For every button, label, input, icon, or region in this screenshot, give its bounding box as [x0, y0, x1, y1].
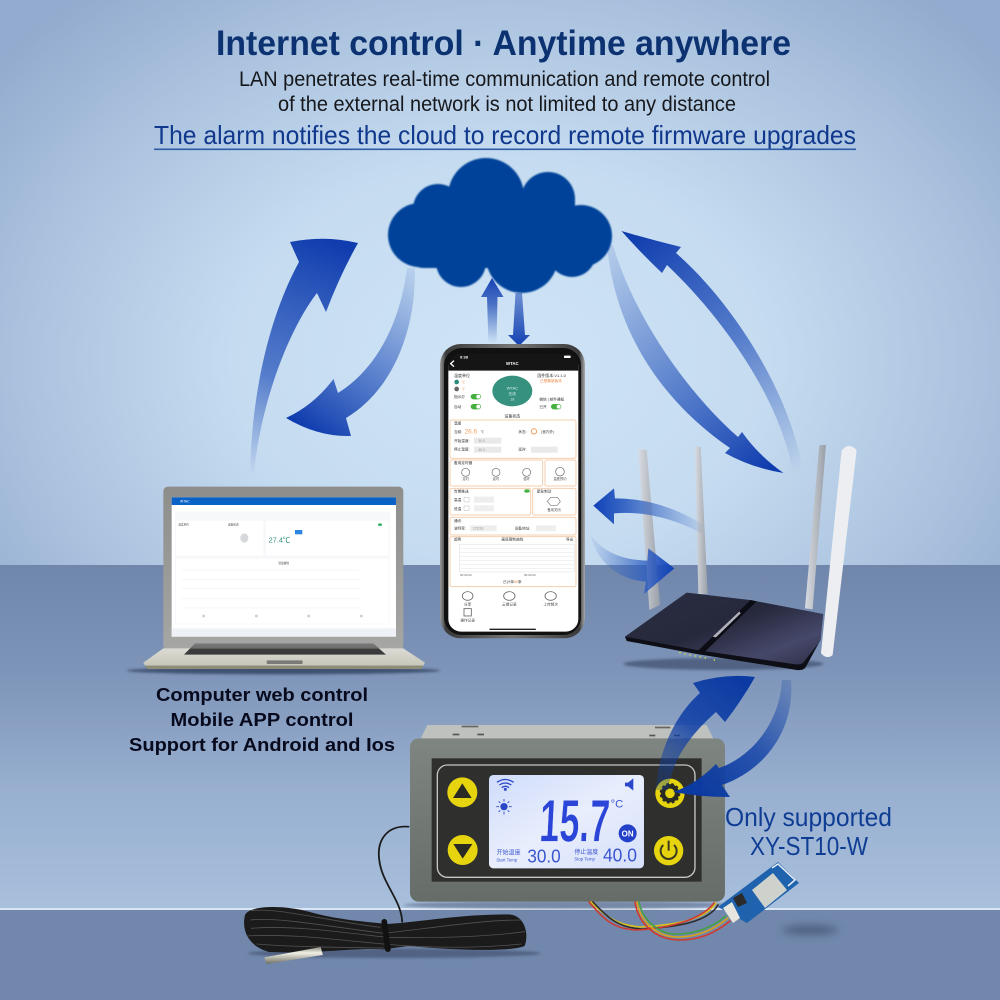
lead wire: [379, 827, 409, 922]
timer panels: [450, 460, 576, 486]
timer panels: 延时: [493, 476, 500, 481]
LCD display: [489, 775, 644, 868]
cable tie: [384, 922, 388, 949]
stop temperature: 40.0: [603, 844, 637, 865]
wifi symbol: [497, 779, 514, 790]
device status header: 温度单位: [454, 372, 470, 378]
device status header: [454, 372, 567, 419]
arrow: cloud to router: [607, 245, 784, 473]
sun symbol: [496, 799, 512, 814]
arrow: phone to router: [590, 533, 674, 594]
phone bottom actions: [460, 592, 558, 630]
keyboard: [184, 643, 386, 655]
phone header: WTAC: [506, 361, 519, 366]
caption: control modes: Mobile APP control: [170, 709, 354, 730]
background wall: [0, 0, 1000, 566]
router front edge: [625, 637, 818, 670]
caption: control modes: Support for Android and Ios: [129, 734, 395, 755]
temperature panel: 40.0: [478, 448, 485, 452]
laptop shadow: [127, 667, 440, 674]
temperature panel: 停止温度:: [454, 447, 470, 452]
alarm panels: 紧急制动: [537, 489, 552, 494]
subtitle text block: of the external network is not limited to any distance: [278, 93, 736, 116]
alarm panels: 备用关闭: [547, 507, 561, 512]
laptop keyboard deck: [143, 648, 425, 666]
laptop screen: 27.4℃: [269, 535, 291, 544]
alarm panels: 高温: [454, 497, 462, 502]
temperature panel: 26.6: [465, 429, 477, 436]
temperature chart panel: 00:00:00: [460, 573, 472, 577]
phone header: [448, 354, 578, 371]
device status header: 已开: [539, 405, 547, 409]
controller shadow: [403, 901, 730, 909]
antenna 3: [805, 445, 826, 609]
router shadow: [623, 658, 823, 670]
arrow: router to controller: [656, 676, 755, 790]
temperature panel: 当前:: [454, 429, 462, 434]
degree unit: °C: [611, 798, 623, 810]
start temperature: 开始温度: [497, 848, 521, 856]
laptop screen: 温度单位: [178, 522, 189, 526]
laptop front edge: [145, 660, 423, 669]
speaker symbol: [625, 778, 633, 791]
temperature chart panel: 高低限制曲线: [501, 537, 524, 542]
title: Internet control · Anytime anywhere: [216, 24, 791, 63]
timer panels: 定时: [462, 476, 470, 481]
start temperature: Start Temp: [496, 857, 518, 862]
alarm panels: [450, 488, 576, 515]
temperature panel: 状态:: [518, 429, 527, 434]
laptop screen: 温度曲线: [278, 561, 289, 565]
router body: [625, 593, 823, 670]
laptop screen: 设备状态: [228, 522, 239, 526]
wire highlights: [247, 910, 525, 948]
antenna 4: [821, 446, 857, 657]
temperature chart panel: [450, 537, 576, 587]
button: power: [654, 836, 683, 865]
communication panel: 通讯: [454, 518, 462, 523]
coil shadow: [248, 949, 541, 958]
phone header: 9:38: [460, 355, 469, 360]
temperature reading: 15.7: [538, 787, 611, 854]
laptop: [127, 487, 440, 674]
temperature panel: [450, 420, 576, 458]
arrow: cloud to phone: [508, 293, 530, 346]
temperature panel: 30.0: [478, 439, 485, 443]
temperature chart panel: 00:00:00: [524, 573, 536, 577]
communication panel: 设备地址:: [515, 526, 530, 531]
temperature chart panel: 导出: [566, 537, 574, 542]
controller case: [410, 738, 725, 902]
temperature chart panel: 趋势: [454, 537, 462, 542]
temperature panel: (室内外): [541, 429, 554, 434]
button: up: [447, 777, 477, 807]
stop temperature: 停止温度: [574, 848, 598, 856]
arrow: cloud to laptop: [286, 268, 415, 436]
cloud icon: [388, 158, 612, 293]
device status header: 在线: [509, 391, 516, 396]
start temperature: [496, 845, 561, 866]
arrow: router to cloud: [622, 231, 803, 472]
timer panels: 循环: [523, 476, 531, 481]
temperature panel: 开始温度:: [454, 438, 470, 443]
stop temperature: Stop Temp: [574, 856, 596, 861]
wifi router: [590, 445, 857, 670]
device status header: 设备状态: [504, 413, 520, 419]
arrow: controller to router: [673, 680, 791, 797]
communication panel: 115200: [473, 527, 484, 531]
phone bottom actions: 上传频次: [543, 602, 558, 607]
laptop screen: [172, 497, 396, 637]
ON badge: ON: [622, 829, 634, 838]
metal probe: [264, 947, 323, 964]
temperature panel: 温度: [454, 420, 462, 425]
subtitle text block: LAN penetrates real-time communication and remote control: [239, 68, 770, 91]
phone bottom actions: 操作记录: [460, 617, 475, 622]
temperature chart panel: 已计单60条: [503, 579, 522, 584]
temperature panel: ℃: [481, 430, 485, 434]
desk surface: [0, 565, 1000, 910]
temperature controller: [403, 725, 730, 909]
temperature panel: 延时:: [518, 447, 527, 452]
module shadow: [782, 925, 838, 935]
timer panels: 温差预约: [553, 476, 567, 481]
alarm panels: 低温: [454, 506, 462, 511]
alarm panels: 告警推送: [454, 489, 469, 494]
device status header: WTAC: [507, 385, 518, 390]
arrow: router to phone: [593, 488, 702, 533]
arrow: phone to cloud: [481, 278, 504, 345]
lower table band: [0, 908, 1000, 1000]
laptop screen: WTAC: [180, 499, 190, 503]
antenna 1: [638, 449, 660, 610]
status lights: [679, 652, 715, 661]
subtitle text block: [239, 68, 770, 116]
device status header: 固件版本:V1.1.0: [537, 372, 567, 378]
device status header: 微信 | 邮件通知: [539, 396, 565, 401]
device status header: ℉: [462, 388, 466, 392]
phone bottom actions: 云端记录: [502, 602, 517, 607]
communication panel: 波特率:: [454, 526, 466, 531]
ON badge: [619, 824, 637, 842]
device status header: 18: [510, 398, 514, 402]
phone screen: [444, 348, 581, 635]
front panel: [432, 758, 702, 882]
timer panels: 备用定时器: [454, 460, 473, 465]
underlined feature line: The alarm notifies the cloud to record remote firmware upgrades: [154, 120, 856, 150]
model note: [725, 802, 892, 861]
router center seam: [697, 600, 757, 653]
model note: Only supported: [725, 802, 892, 832]
smartphone: [440, 344, 585, 638]
device status header: 指示灯: [454, 394, 465, 399]
start temperature: 30.0: [527, 845, 561, 866]
communication panel: [450, 517, 576, 535]
model note: XY-ST10-W: [750, 831, 868, 861]
button: down: [448, 835, 478, 865]
WiFi module board: [718, 862, 799, 923]
temperature sensor cable: [244, 827, 541, 964]
stop temperature: [574, 844, 637, 865]
antenna 2: [695, 447, 708, 594]
laptop lid: [163, 487, 403, 650]
caption: control modes: Computer web control: [156, 684, 368, 705]
device status header: ℃: [462, 381, 466, 385]
phone bezel: [440, 344, 585, 638]
seam highlight: [713, 611, 741, 637]
colored connector wires: [589, 902, 730, 940]
phone bottom actions: 分享: [464, 602, 472, 607]
rear housing: [420, 725, 714, 740]
arrow: laptop to cloud: [250, 239, 358, 472]
device status header: 已是最新版本: [540, 378, 562, 383]
device status header: 自动: [454, 404, 462, 409]
button: settings: [655, 779, 685, 808]
coil body: [244, 907, 526, 952]
caption: control modes: [129, 684, 395, 755]
